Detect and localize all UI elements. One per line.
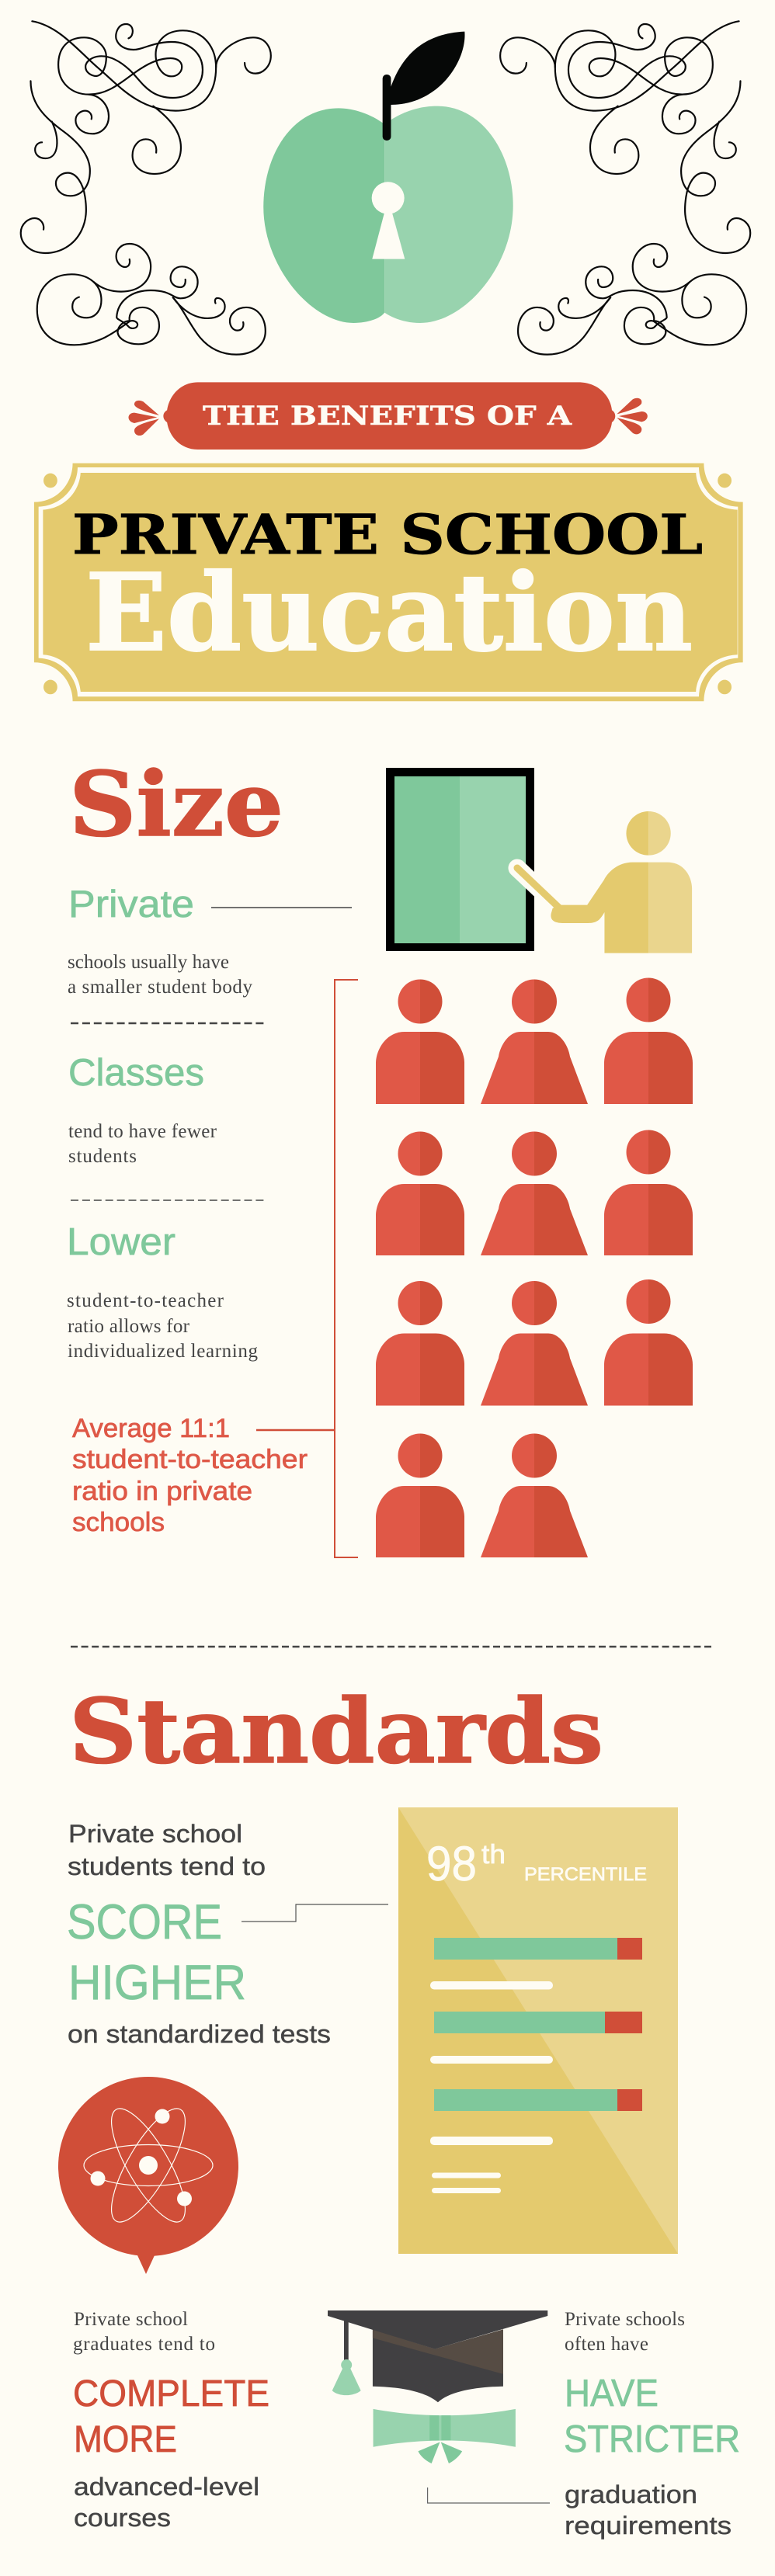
plaque: private school education title [34,463,743,701]
text block: complete more: MORE [74,2419,177,2460]
text block: complete more: graduates tend to [73,2334,215,2355]
text block: have stricter: STRICTER [564,2418,740,2460]
callout: average ratio: schools [72,1508,165,1537]
callout: average ratio [72,1414,308,1537]
plaque: private school education title: Education [85,550,693,675]
ornament: top left flourish [21,21,271,253]
text block: score higher [67,1820,331,2048]
text: 98th percentile [426,1837,647,1891]
icon group: students row 2 [376,1130,693,1255]
text block: classes [68,1052,217,1167]
icon: student [376,980,464,1104]
arrow: connector to percentile card [242,1904,388,1922]
ornament: top right flourish [500,21,750,253]
icon: blackboard [386,768,534,951]
text block: private schools: a smaller student body [68,977,253,998]
icon: student [481,1433,588,1557]
icon group: students row 3 [376,1279,693,1405]
icon: apple with keyhole [263,32,513,323]
text block: have stricter: graduation [565,2481,697,2508]
text block: complete more: Private school [74,2309,188,2330]
text block: complete more: advanced-level [74,2473,259,2501]
text: 98th percentile: th [481,1840,506,1870]
icon: student [376,1132,464,1255]
ornament: bottom right flourish [518,244,746,355]
text block: score higher: Private school [68,1820,242,1848]
icon: student [376,1281,464,1405]
text block: lower: individualized learning [68,1341,258,1362]
text block: private schools: schools usually have [68,952,229,973]
icon: student [481,1281,588,1405]
text block: private schools [68,884,352,998]
text block: private schools: Private [68,884,194,925]
text block: lower: Lower [67,1221,176,1263]
ornament: bottom left flourish [37,244,266,355]
text block: classes: tend to have fewer [68,1121,217,1142]
text: 98th percentile: PERCENTILE [524,1864,647,1885]
text block: score higher: HIGHER [68,1956,246,2010]
text block: lower [67,1221,258,1362]
callout: average ratio: student-to-teacher [72,1445,308,1474]
heading: size: Size [69,752,283,856]
icon: graduation cap and diploma [328,2310,547,2463]
bar chart: score bars [430,1938,642,2193]
text block: have stricter: HAVE [565,2373,659,2415]
bracket: students grouping [256,980,358,1557]
icon: student [604,1130,693,1255]
text block: have stricter: requirements [565,2512,732,2540]
text block: have stricter: often have [565,2334,648,2355]
arrow: connector to graduation requirements [428,2487,550,2503]
text block: score higher: students tend to [68,1852,266,1880]
text block: classes: students [68,1146,137,1167]
icon: student [604,978,693,1104]
icon: student [481,980,588,1104]
icon: student [604,1279,693,1405]
text block: score higher: SCORE [67,1895,222,1949]
heading: standards: Standards [69,1679,603,1783]
icon: atom speech bubble [58,2077,238,2274]
banner: the benefits of a [128,382,648,450]
text: 98th percentile: 98 [426,1837,477,1891]
text block: lower: student-to-teacher [67,1290,224,1311]
callout: average ratio: ratio in private [72,1477,252,1506]
text block: lower: ratio allows for [68,1316,190,1337]
text block: complete more: courses [74,2504,171,2532]
text block: score higher: on standardized tests [68,2020,331,2048]
text block: classes: Classes [68,1052,204,1094]
plaque: private school education title: PRIVATE SCHOOL [72,502,703,567]
icon group: students row 1 [376,978,693,1104]
text block: have stricter: Private schools [565,2309,685,2330]
panel: percentile card [398,1807,678,2254]
text block: have stricter [564,2309,740,2540]
banner: the benefits of a: THE BENEFITS OF A [203,401,572,432]
icon: student [481,1132,588,1255]
icon: teacher with pointer [517,811,692,953]
icon group: students row 4 [376,1433,588,1557]
text block: complete more [73,2309,269,2532]
icon: student [376,1433,464,1557]
callout: average ratio: Average 11:1 [72,1414,230,1443]
text block: complete more: COMPLETE [73,2373,269,2415]
